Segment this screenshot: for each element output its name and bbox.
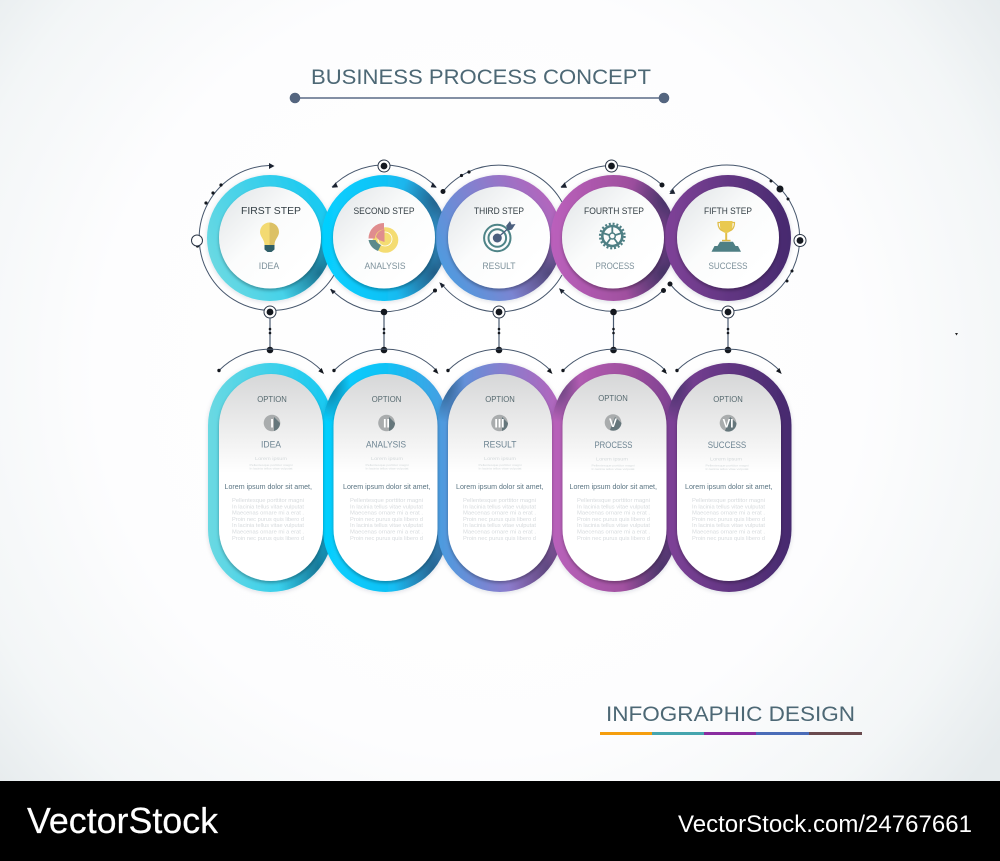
paragraph: Proin nec purus quis libero d [463,536,536,542]
label: ANALYSIS [366,440,406,450]
ring 4 [550,175,676,301]
paragraph: Proin nec purus quis libero d [350,536,423,542]
paragraph: In lacinia tellus vitae vulputat [577,504,650,510]
arc: fourth step top [561,165,662,187]
paragraph: Proin nec purus quis libero d [577,517,650,523]
infographic design heading: INFOGRAPHIC DESIGN [606,702,855,726]
title: BUSINESS PROCESS CONCEPT [311,65,651,89]
paragraph: In lacinia tellus vitae vulputat [463,504,536,510]
small caption: Pellentesque porttitor magni [366,463,409,467]
small caption: In lacinia tellus vitae vulputat [592,467,635,471]
arrowheads: step arcs [269,163,675,294]
paragraph: Proin nec purus quis libero d [692,517,765,523]
heading: first step: FIRST STEP [241,205,301,217]
arc: second step bottom [331,289,435,312]
small caption [478,456,522,470]
small caption: Lorem ipsum [596,456,628,462]
colour underline [600,732,862,735]
paragraph: Proin nec purus quis libero d [577,536,650,542]
small caption [592,456,635,471]
ring 3 [436,175,562,301]
icon: trophy [712,221,741,252]
label: process: PROCESS [596,261,635,271]
label: RESULT [484,440,517,450]
panel: third step [448,186,550,288]
paragraph: Pellentesque porttitor magni [692,498,765,504]
pill ring 3 [438,363,562,592]
subheading: Lorem ipsum dolor sit amet, [570,482,657,491]
arc: fourth step bottom [561,290,663,311]
option heading: OPTION [713,394,743,404]
small caption: Pellentesque porttitor magni [592,464,635,468]
paragraph: Maecenas ornare mi a erat . [232,530,304,536]
footer url: VectorStock.com/24767661 [678,811,972,838]
panel: option idea [219,374,323,581]
small caption: In lacinia tellus vitae vulputat [366,466,409,470]
paragraph: Proin nec purus quis libero d [232,536,304,542]
label: IDEA [261,440,281,450]
paragraph: In lacinia tellus vitae vulputat [350,504,423,510]
subheading: Lorem ipsum dolor sit amet, [343,482,430,491]
subheading: Lorem ipsum dolor sit amet, [685,482,772,491]
icon: gear [600,224,625,248]
small caption [706,456,749,471]
panel: first step [219,186,321,288]
option heading: OPTION [372,394,401,404]
panel: second step [333,186,435,288]
ring 1 [207,175,333,301]
target nodes [264,160,806,318]
small caption: Lorem ipsum [371,456,403,461]
small caption: Lorem ipsum [255,456,287,461]
small caption [250,456,293,470]
icon: numeral I [264,415,280,431]
icon: numeral II [378,415,395,431]
panel: option success [677,374,781,581]
small caption [366,456,409,470]
panel: option result [448,374,552,581]
panel: fifth step [677,186,779,288]
paragraph: Maecenas ornare mi a erat . [463,530,536,536]
paragraph: Pellentesque porttitor magni [232,498,304,504]
paragraph: In lacinia tellus vitae vulputat [463,523,536,529]
paragraph: Maecenas ornare mi a erat . [577,530,650,536]
ring 2 [322,175,448,301]
step rings [207,175,791,301]
arcs over option pills [217,349,782,374]
small caption: Lorem ipsum [710,456,742,462]
option heading: OPTION [485,394,515,404]
paragraph: Maecenas ornare mi a erat . [692,511,765,517]
orbit arcs: step circles [199,165,800,312]
panel: option process [562,374,666,581]
connectors between steps and options [267,315,731,353]
paragraph [577,498,650,542]
small caption: In lacinia tellus vitae vulputat [478,466,522,470]
small caption: In lacinia tellus vitae vulputat [250,466,293,470]
icon: numeral II: II [383,416,390,430]
icon: numeral VI: VI [723,418,733,430]
option pill rings [208,363,792,592]
paragraph: Maecenas ornare mi a erat . [463,511,536,517]
label: success: SUCCESS [708,261,748,271]
paragraph: Maecenas ornare mi a erat . [577,511,650,517]
paragraph: In lacinia tellus vitae vulputat [692,523,765,529]
paragraph: Pellentesque porttitor magni [463,498,536,504]
subheading: Lorem ipsum dolor sit amet, [224,482,312,491]
small caption: Pellentesque porttitor magni [706,464,749,468]
title rule [290,93,669,103]
pill ring 4 [552,363,677,592]
arc: second step top [332,165,436,187]
arc: third step bottom [441,275,562,312]
small caption: In lacinia tellus vitae vulputat [706,467,749,471]
small caption: Pellentesque porttitor magni [478,463,522,467]
panel: option analysis [334,374,438,581]
paragraph [350,498,423,542]
pill ring 2 [323,363,448,592]
paragraph: Maecenas ornare mi a erat . [350,530,423,536]
pill ring 1 [208,363,333,592]
icon: numeral I: I [270,416,274,430]
paragraph: Proin nec purus quis libero d [692,536,765,542]
arc: first step [199,166,334,310]
heading: fifth step: FIFTH STEP [704,206,752,216]
icon: numeral V [605,414,622,431]
icon: numeral III: III [494,416,505,430]
paragraph: Proin nec purus quis libero d [232,517,304,523]
paragraph: In lacinia tellus vitae vulputat [232,523,304,529]
icon: light bulb [260,222,279,252]
heading: second step: SECOND STEP [354,206,414,216]
pill ring 5 [666,363,792,592]
heading: third step: THIRD STEP [474,206,524,216]
small caption: Lorem ipsum [484,456,516,461]
paragraph: Maecenas ornare mi a erat . [350,511,423,517]
option heading: OPTION [598,393,628,403]
decorative marker [955,333,958,336]
node dots [196,170,793,315]
paragraph: Pellentesque porttitor magni [350,498,423,504]
open node [192,235,202,246]
icon: numeral III [491,415,508,431]
icon: numeral V: V [609,416,617,430]
label: PROCESS [594,440,633,450]
small caption: Pellentesque porttitor magni [250,463,293,467]
subheading: Lorem ipsum dolor sit amet, [456,482,544,491]
label: idea: IDEA [259,261,279,271]
label: analysis: ANALYSIS [364,261,406,271]
paragraph: Maecenas ornare mi a erat . [692,530,765,536]
paragraph: In lacinia tellus vitae vulputat [577,523,650,529]
paragraph: Proin nec purus quis libero d [350,517,423,523]
icon: target [484,221,516,251]
panel: fourth step [562,186,664,288]
paragraph: Pellentesque porttitor magni [577,498,650,504]
paragraph: In lacinia tellus vitae vulputat [692,504,765,510]
paragraph: Proin nec purus quis libero d [463,517,536,523]
paragraph [232,498,304,542]
heading: fourth step: FOURTH STEP [584,206,644,216]
paragraph: Maecenas ornare mi a erat . [232,511,304,517]
paragraph: In lacinia tellus vitae vulputat [350,523,423,529]
option heading: OPTION [257,394,287,404]
arc: fifth step [670,165,800,311]
paragraph [463,498,536,542]
label: SUCCESS [708,440,746,450]
label: result: RESULT [482,261,516,271]
paragraph [692,498,765,542]
icon: numeral VI [720,415,737,432]
ring 5 [665,175,791,301]
icon: donut chart [368,223,398,253]
footer bar [0,781,1000,861]
footer logo: VectorStock [27,800,219,841]
arc: third step top [443,165,562,202]
paragraph: In lacinia tellus vitae vulputat [232,504,304,510]
